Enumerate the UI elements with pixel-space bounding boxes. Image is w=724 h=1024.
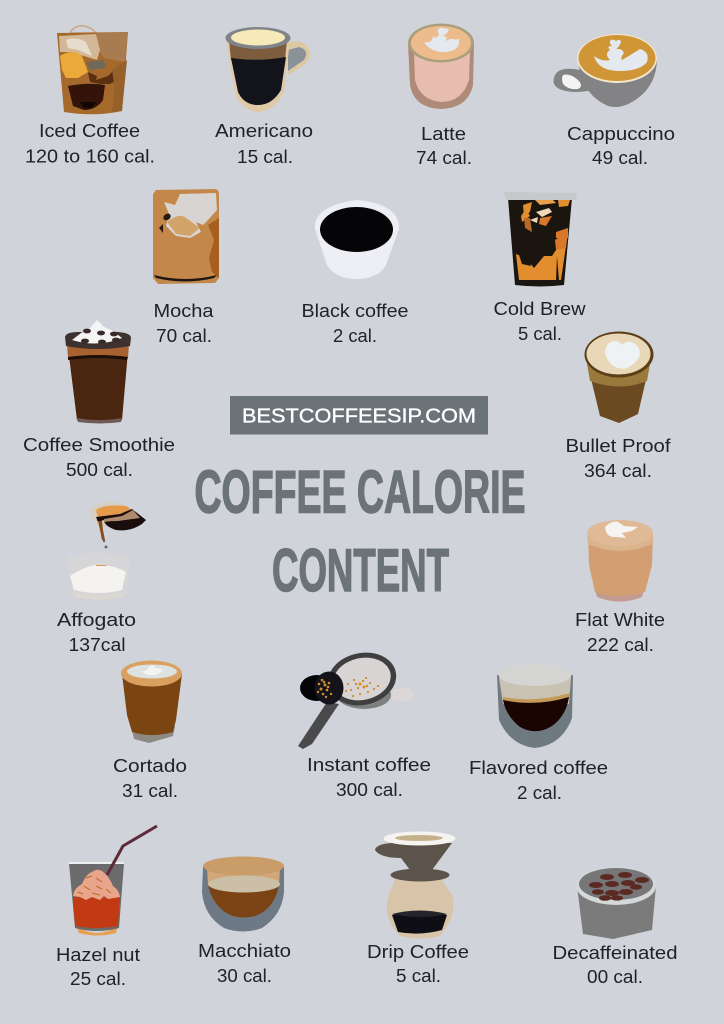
label bbox=[215, 120, 313, 167]
label: 00 cal. bbox=[587, 966, 643, 987]
label bbox=[56, 944, 140, 989]
drink: Iced Coffee bbox=[25, 26, 155, 167]
label: Instant coffee bbox=[307, 754, 431, 775]
icon: affogato bbox=[68, 502, 146, 600]
label: 15 cal. bbox=[237, 146, 293, 167]
icon: flavored coffee bbox=[497, 664, 573, 748]
label bbox=[302, 300, 408, 346]
label: Cappuccino bbox=[567, 123, 675, 144]
label: 300 cal. bbox=[336, 779, 403, 800]
label: 49 cal. bbox=[592, 147, 648, 168]
drink: Flat White bbox=[575, 520, 665, 655]
icon: instant coffee bbox=[298, 646, 415, 749]
drink: Decaffeinated bbox=[552, 867, 678, 987]
icon: latte bbox=[408, 24, 474, 109]
label bbox=[494, 298, 586, 344]
icon: bullet proof bbox=[584, 332, 654, 423]
icon: hazel nut bbox=[69, 826, 157, 936]
label: Latte bbox=[421, 123, 466, 144]
label: Americano bbox=[215, 120, 313, 141]
label: Cold Brew bbox=[494, 298, 586, 319]
icon: drip coffee bbox=[375, 832, 456, 938]
label bbox=[567, 123, 675, 168]
label: 137cal bbox=[68, 634, 126, 655]
icon: decaffeinated bbox=[576, 867, 656, 939]
label: Cortado bbox=[113, 755, 187, 776]
label: Drip Coffee bbox=[367, 941, 469, 962]
label bbox=[552, 942, 678, 987]
label: 5 cal. bbox=[396, 965, 441, 986]
label bbox=[113, 755, 187, 801]
icon: americano bbox=[226, 27, 310, 112]
label: Affogato bbox=[57, 609, 136, 630]
label bbox=[154, 300, 214, 346]
drink: Coffee Smoothie bbox=[23, 320, 175, 480]
label: 74 cal. bbox=[416, 147, 472, 168]
title: COFFEE CALORIE bbox=[194, 458, 526, 526]
icon: cold brew bbox=[504, 192, 577, 286]
label bbox=[469, 757, 608, 803]
icon: iced coffee bbox=[57, 26, 128, 114]
drink: Cortado bbox=[113, 660, 187, 801]
drink: Latte bbox=[408, 24, 474, 168]
label: 222 cal. bbox=[587, 634, 654, 655]
icon: mocha bbox=[153, 189, 219, 284]
label bbox=[25, 120, 155, 166]
drink: Affogato bbox=[57, 502, 146, 655]
label: 25 cal. bbox=[70, 968, 126, 989]
label bbox=[307, 754, 431, 800]
label: Macchiato bbox=[198, 940, 291, 961]
label bbox=[367, 941, 469, 986]
label: Decaffeinated bbox=[552, 942, 678, 963]
label: 2 cal. bbox=[517, 782, 562, 803]
label: 30 cal. bbox=[217, 965, 272, 986]
icon: cappuccino bbox=[554, 34, 657, 107]
label: 500 cal. bbox=[66, 459, 133, 480]
icon: coffee smoothie bbox=[65, 320, 131, 424]
label bbox=[566, 435, 672, 481]
drink: Cappuccino bbox=[554, 34, 675, 168]
drink: Cold Brew bbox=[494, 192, 586, 344]
icon: flat white bbox=[587, 520, 653, 602]
label bbox=[198, 940, 291, 986]
label: Black coffee bbox=[302, 300, 408, 321]
drink: Black coffee bbox=[302, 200, 408, 346]
label bbox=[575, 609, 665, 655]
icon: black coffee bbox=[315, 200, 399, 279]
drink: Mocha bbox=[153, 189, 219, 346]
drink: Bullet Proof bbox=[566, 332, 672, 481]
label: Flavored coffee bbox=[469, 757, 608, 778]
label: 364 cal. bbox=[584, 460, 652, 481]
label bbox=[23, 434, 175, 480]
label: 31 cal. bbox=[122, 780, 178, 801]
label: 5 cal. bbox=[518, 323, 562, 344]
label: 2 cal. bbox=[333, 325, 377, 346]
label: Mocha bbox=[154, 300, 214, 321]
label: Iced Coffee bbox=[39, 120, 140, 141]
drink: Americano bbox=[215, 27, 313, 167]
label: Hazel nut bbox=[56, 944, 140, 965]
label: 120 to 160 cal. bbox=[25, 146, 155, 166]
drink: Instant coffee bbox=[298, 646, 431, 800]
banner: website name: BESTCOFFEESIP.COM bbox=[242, 404, 476, 427]
title: CONTENT bbox=[272, 537, 449, 604]
drink: Macchiato bbox=[198, 856, 291, 986]
label bbox=[416, 123, 472, 168]
icon: cortado bbox=[121, 660, 182, 743]
drink: Flavored coffee bbox=[469, 664, 608, 803]
label: Coffee Smoothie bbox=[23, 434, 175, 455]
title bbox=[194, 458, 526, 604]
icon: macchiato bbox=[202, 856, 284, 932]
label: 70 cal. bbox=[156, 325, 212, 346]
label bbox=[57, 609, 136, 655]
banner: website name bbox=[230, 396, 488, 434]
drink: Hazel nut bbox=[56, 826, 157, 989]
label: Bullet Proof bbox=[566, 435, 672, 456]
label: Flat White bbox=[575, 609, 665, 630]
drink: Drip Coffee bbox=[367, 832, 469, 986]
